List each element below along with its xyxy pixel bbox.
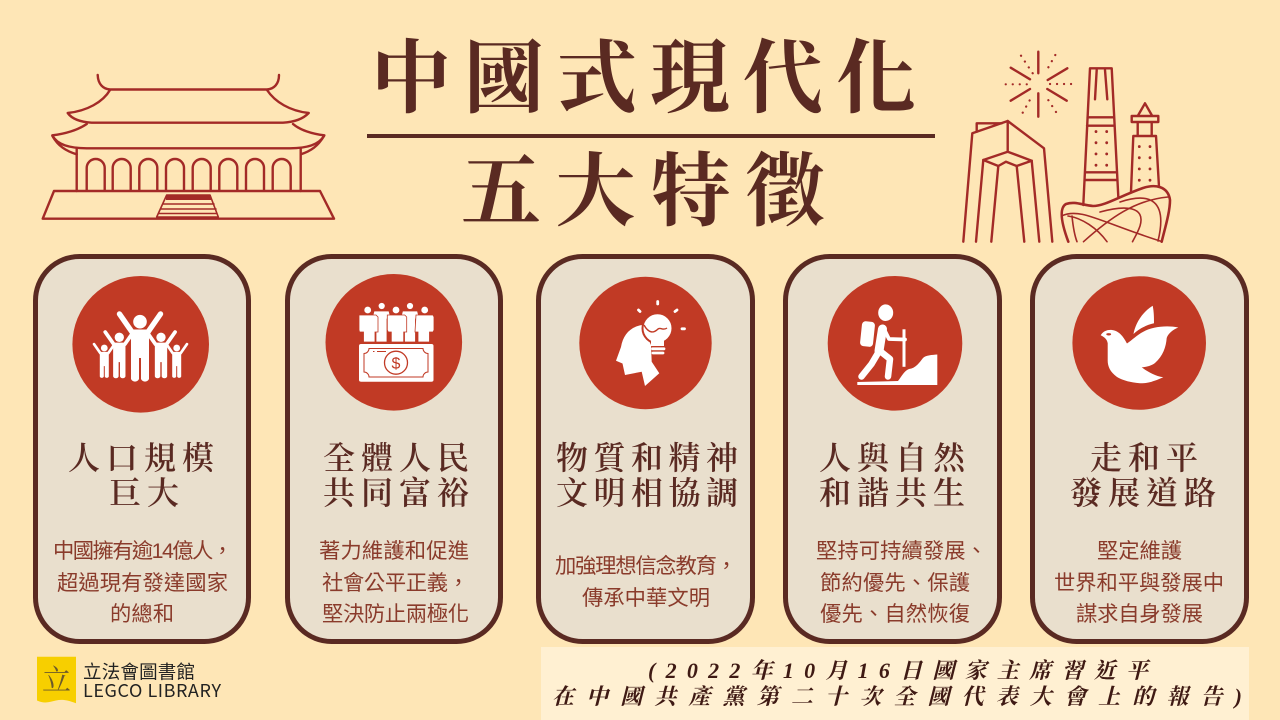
logo: LegCo Library — [37, 657, 221, 703]
text: card 4 — [816, 539, 987, 626]
text: card 1: 超過現有發達國家 — [57, 571, 228, 595]
text: card 2: 著力維護和促進 — [319, 539, 469, 563]
icon: crowd of people — [72, 276, 209, 413]
icon: dove — [1072, 276, 1206, 410]
text: card 4: 節約優先、保護 — [820, 571, 970, 595]
panel: card 1 — [36, 256, 248, 642]
heading: card 4 — [819, 440, 967, 511]
heading: card 3 — [556, 440, 738, 511]
logo: LegCo Library: LEGCO LIBRARY — [83, 677, 221, 703]
logo: LegCo Library: 立法會圖書館 — [83, 658, 195, 684]
heading: card 5: 走和平 — [1090, 440, 1198, 476]
icon: city skyline with fireworks — [963, 52, 1170, 242]
panel: card 2 — [288, 256, 500, 642]
text: card 3: 傳承中華文明 — [582, 586, 710, 610]
text: card 2: 堅決防止兩極化 — [322, 602, 469, 626]
panel: card 3 — [538, 256, 752, 642]
text: card 1: 的總和 — [110, 602, 174, 626]
icon: hiker — [828, 276, 962, 411]
panel: card 5 — [1032, 256, 1246, 642]
title: 中國式現代化 — [371, 36, 916, 124]
heading: card 2: 共同富裕 — [323, 475, 470, 511]
heading: card 2 — [323, 440, 470, 511]
icon: people and banknote: $ — [392, 356, 401, 372]
heading: card 3: 文明相協調 — [556, 475, 738, 511]
heading: card 5: 發展道路 — [1070, 475, 1216, 511]
text: card 5: 堅定維護 — [1097, 539, 1182, 563]
text: card 2: 社會公平正義， — [322, 571, 469, 595]
text: card 4: 堅持可持續發展、 — [816, 539, 987, 563]
text: card 5 — [1054, 539, 1224, 626]
heading: card 2: 全體人民 — [323, 440, 469, 476]
heading: card 4: 和諧共生 — [819, 475, 965, 511]
heading: card 4: 人與自然 — [819, 440, 967, 476]
heading: card 5 — [1070, 440, 1216, 511]
text: card 3 — [555, 554, 737, 610]
icon: fireworks — [1006, 52, 1072, 117]
title — [367, 36, 935, 237]
text: card 5: 世界和平與發展中 — [1054, 571, 1224, 595]
text: card 3: 加強理想信念教育， — [555, 554, 737, 578]
icon: head with light bulb — [579, 277, 712, 409]
source note: (2022年10月16日國家主席習近平 — [648, 658, 1151, 683]
panel: card 4 — [786, 256, 1000, 642]
heading: card 1: 人口規模 — [68, 440, 215, 476]
heading: card 1 — [68, 440, 215, 511]
icon: palace — [43, 75, 334, 219]
text: card 2 — [319, 539, 469, 626]
text: card 4: 優先、自然恢復 — [820, 602, 970, 626]
text: card 1: 中國擁有逾14億人， — [53, 539, 233, 563]
text: card 1 — [53, 539, 233, 626]
icon: people and banknote — [326, 274, 462, 411]
source note: 在中國共產黨第二十次全國代表大會上的報告) — [552, 684, 1242, 709]
logo: LegCo Library: 立 — [42, 664, 71, 697]
heading: card 3: 物質和精神 — [556, 440, 738, 476]
title: 五大特徵 — [461, 149, 825, 237]
source note — [541, 647, 1249, 720]
text: card 5: 謀求自身發展 — [1076, 602, 1203, 626]
heading: card 1: 巨大 — [109, 475, 179, 511]
